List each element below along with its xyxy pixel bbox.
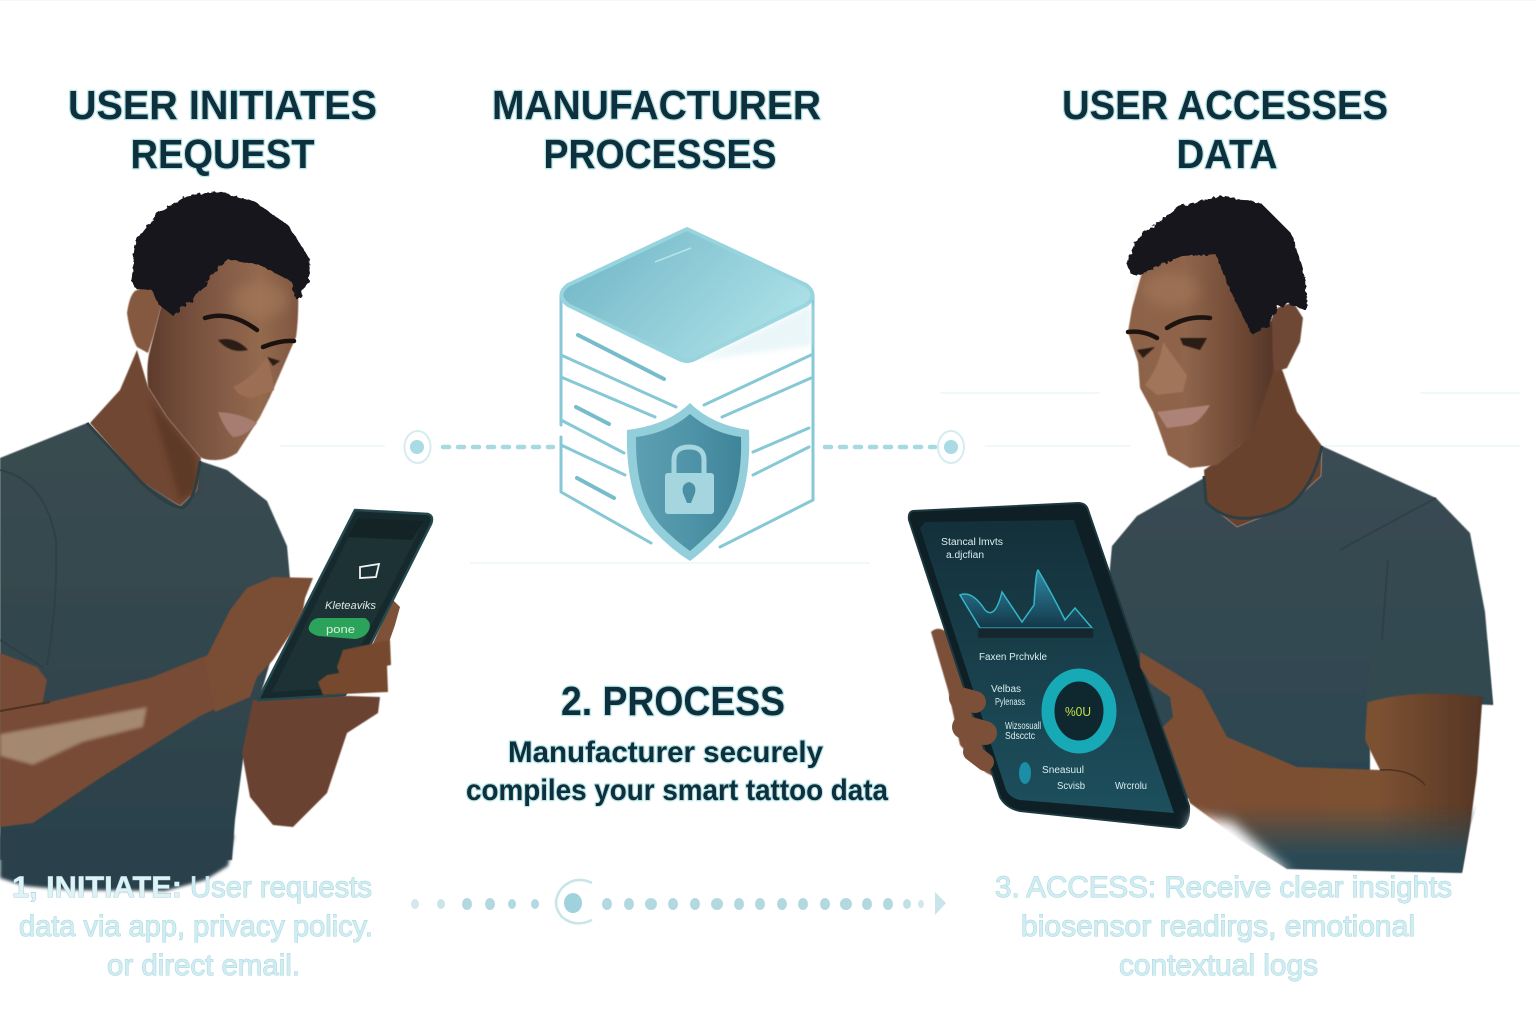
rear finger <box>370 600 400 650</box>
title: user initiates request <box>68 82 377 177</box>
left hand behind tablet <box>931 629 1000 780</box>
timeline dots <box>411 898 924 910</box>
person: user with tablet <box>909 198 1493 885</box>
process description: Manufacturer securely <box>508 736 823 769</box>
app logo <box>360 564 379 578</box>
screen subheading: a.djcfian <box>946 550 984 561</box>
ear <box>127 287 162 353</box>
holding arm <box>242 695 380 827</box>
shield outer <box>627 403 749 561</box>
timeline arrowhead <box>935 892 946 915</box>
mouth <box>1157 405 1210 428</box>
server lines <box>561 295 813 547</box>
title: user initiates request: REQUEST <box>130 131 314 177</box>
brows <box>205 316 294 347</box>
collar <box>87 423 200 508</box>
eyes <box>1137 338 1207 358</box>
stat label two: Wizsosuall <box>1005 721 1041 732</box>
padlock body <box>665 473 714 514</box>
tablet gripping fingers <box>960 698 985 762</box>
step 1 text: 1, INITIATE: <box>12 871 182 904</box>
step 1 text: data via app, privacy policy. <box>19 910 373 943</box>
sleeve seam <box>1340 498 1436 690</box>
server short accents <box>576 335 664 498</box>
pointing hand <box>205 577 313 712</box>
title: manufacturer processes <box>492 82 821 177</box>
right dashed connector <box>825 431 964 463</box>
title: user accesses data: DATA <box>1176 131 1278 177</box>
neck shadow <box>150 400 198 500</box>
person: user with phone <box>0 193 432 891</box>
keyhole <box>683 482 695 503</box>
timeline arrow <box>411 880 946 923</box>
title: manufacturer processes: MANUFACTURER <box>492 82 821 128</box>
footer label: Sneasuul <box>1042 765 1084 776</box>
near arm <box>0 640 250 827</box>
process description: compiles your smart tattoo data <box>466 774 888 807</box>
section label: Faxen Prchvkle <box>979 652 1047 663</box>
left node <box>404 431 430 463</box>
shirt <box>0 423 291 860</box>
step 1 text: User requests <box>190 871 372 904</box>
title: user accesses data: USER ACCESSES <box>1062 82 1388 128</box>
ear <box>1267 302 1303 372</box>
donut value: %0U <box>1065 704 1091 719</box>
white fade patch <box>1190 816 1290 885</box>
footer value: Scvisb <box>1057 781 1085 792</box>
step 3 text: 3. ACCESS: Receive clear insights <box>995 871 1452 904</box>
timeline node <box>556 880 592 923</box>
icon: secure data server <box>561 229 813 561</box>
chart base shade <box>978 628 1093 638</box>
step 1 text: or direct email. <box>107 949 300 982</box>
face <box>1128 245 1273 468</box>
holding fingers <box>318 640 391 695</box>
screen heading: Stancal lmvts <box>941 537 1003 548</box>
lower dark fade <box>1200 800 1479 873</box>
area chart <box>960 570 1092 628</box>
stat label one: Velbas <box>991 684 1021 695</box>
donut chart <box>1048 675 1110 747</box>
eyes <box>218 339 280 366</box>
process description <box>466 736 888 807</box>
right dots <box>825 445 935 449</box>
donut ring <box>1048 675 1110 747</box>
neck <box>90 350 201 506</box>
arm crease <box>0 702 50 711</box>
left dots <box>443 445 553 449</box>
forehead highlight <box>232 282 288 318</box>
shield <box>627 403 749 561</box>
forearm biosensor tattoo <box>0 707 147 765</box>
step 1 text <box>12 871 373 982</box>
phone top bar <box>348 518 424 540</box>
hair <box>133 193 308 313</box>
process heading: 2. PROCESS <box>561 678 785 724</box>
button label: pone <box>326 624 355 636</box>
tablet screen <box>920 520 1174 813</box>
shirt <box>1108 446 1493 800</box>
top face detail <box>655 248 691 262</box>
left dashed connector <box>404 431 553 463</box>
arm and thumb <box>1140 652 1483 872</box>
phone <box>258 510 432 700</box>
step 3 text <box>995 871 1452 982</box>
phone screen <box>272 518 424 692</box>
stat value two: Sdscctc <box>1005 731 1035 742</box>
padlock shackle <box>674 447 704 475</box>
stat value one: Pylenass <box>995 697 1025 708</box>
step 3 text: biosensor readirgs, emotional <box>1021 910 1415 943</box>
brows <box>1128 317 1210 338</box>
face <box>147 245 298 460</box>
neck <box>1204 340 1322 527</box>
footer value right: Wrcrolu <box>1115 781 1147 792</box>
shield inner <box>636 414 741 551</box>
elbow crease <box>1380 770 1425 785</box>
title: user accesses data <box>1062 82 1388 177</box>
forehead highlight <box>1142 272 1198 308</box>
step 3 text: contextual logs <box>1119 949 1318 982</box>
app label: Kleteaviks <box>325 600 377 612</box>
right node <box>938 431 964 463</box>
title: user initiates request: USER INITIATES <box>68 82 377 128</box>
nose shading <box>233 357 274 398</box>
hair <box>1128 198 1305 332</box>
tablet <box>909 503 1189 828</box>
tablet body <box>909 503 1189 828</box>
shirt faded hem <box>0 835 234 891</box>
collar <box>1204 446 1322 518</box>
mouth <box>218 412 257 437</box>
title: manufacturer processes: PROCESSES <box>544 131 776 177</box>
green button <box>309 618 370 639</box>
padlock <box>665 447 714 514</box>
sleeve hem <box>1365 640 1493 705</box>
server top face <box>562 229 812 361</box>
decorative faint guide lines <box>0 0 1536 563</box>
sleeve seam <box>0 470 56 668</box>
lid soft shine <box>700 305 812 360</box>
microphone icon <box>1019 762 1031 784</box>
nose shading <box>1145 342 1187 395</box>
phone body <box>258 510 432 700</box>
